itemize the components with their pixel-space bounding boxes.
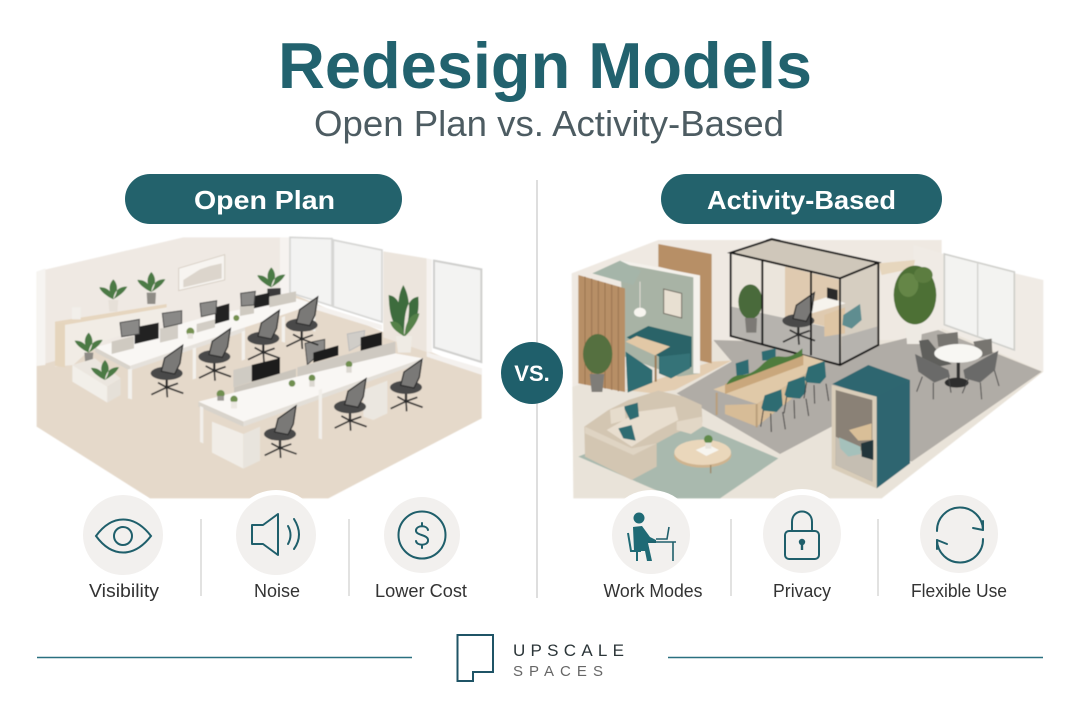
illustration: open plan office [37, 237, 482, 498]
back row chairs [120, 291, 365, 365]
logo mark [458, 635, 493, 681]
icon: dollar coin [398, 512, 446, 558]
floor [572, 327, 1043, 498]
booth rear slat wall [658, 244, 712, 363]
baseboard [317, 305, 382, 330]
shelf plants [72, 272, 165, 319]
feature: Privacy [757, 489, 847, 601]
tall back plant [257, 267, 285, 298]
feature: Lower Cost: Lower Cost [375, 581, 467, 601]
icon: person at desk [628, 512, 676, 561]
back wall [572, 240, 942, 387]
lower desk [198, 353, 423, 443]
window mullion [976, 263, 980, 337]
long table seats rear [736, 348, 776, 377]
icon: speaker [252, 514, 299, 555]
feature: Privacy: Privacy [773, 581, 831, 601]
feature: Work Modes: Work Modes [604, 581, 702, 601]
pill: Open Plan [125, 174, 402, 224]
window 1 [290, 237, 332, 306]
logo wordmark [513, 641, 624, 680]
floor [37, 290, 482, 498]
soffit [878, 260, 915, 275]
feature: Noise: Noise [254, 581, 300, 601]
upper row chairs [151, 297, 318, 397]
feature dividers [201, 519, 878, 596]
logo wordmark: UPSCALE [513, 641, 624, 660]
feature: Lower Cost [375, 490, 467, 601]
wood strip under booth [625, 361, 732, 393]
round meeting table [915, 332, 999, 399]
footer line right [668, 656, 1043, 658]
lower desk small plants [217, 361, 352, 408]
vs badge [501, 342, 563, 404]
feature: Visibility [78, 490, 168, 601]
left wall end [37, 268, 45, 366]
large floor plant [894, 266, 936, 344]
wall cabinet [55, 304, 167, 367]
pill: Activity-Based [661, 174, 942, 224]
pedestals [212, 381, 387, 469]
feature: Flexible Use: Flexible Use [911, 581, 1007, 601]
feature: Noise [231, 490, 321, 601]
icon: padlock [785, 512, 819, 559]
window 2 [333, 240, 382, 322]
logo wordmark: SPACES [513, 663, 603, 680]
booth [592, 260, 700, 377]
grey carpet [677, 330, 1042, 462]
icon: eye [96, 520, 151, 552]
feature: Work Modes [604, 490, 702, 601]
back wall [37, 237, 280, 366]
window [944, 254, 1014, 350]
window 3 [434, 261, 481, 362]
icon: refresh arrows [937, 508, 983, 562]
long communal table [713, 355, 825, 427]
pill: Activity-Based: Activity-Based [707, 185, 896, 215]
glass room [731, 239, 878, 365]
vs badge: VS. [514, 361, 550, 386]
center divider [536, 180, 538, 598]
artwork [179, 255, 225, 291]
sofa [584, 391, 702, 480]
feature: Visibility: Visibility [89, 581, 159, 601]
front slat wall [578, 275, 625, 392]
illustration: activity-based office [572, 239, 1043, 498]
booth seating [626, 326, 692, 393]
lower desk back monitors and panels [233, 332, 395, 404]
footer line left [37, 656, 412, 658]
lower row chairs [264, 359, 423, 458]
small potted plants on desks [75, 315, 239, 364]
sage rug [578, 423, 778, 498]
right wall [913, 245, 1043, 372]
coffee table [674, 435, 731, 473]
right wall [383, 251, 427, 352]
planter box [72, 358, 121, 403]
phone pod [832, 365, 910, 488]
pill: Open Plan: Open Plan [194, 185, 335, 215]
title: Redesign Models [278, 29, 812, 102]
upper desk screens [112, 291, 296, 354]
subtitle: Open Plan vs. Activity-Based [314, 103, 784, 144]
floor plant right [389, 285, 419, 353]
upper desk row [95, 298, 315, 399]
planter [725, 348, 803, 394]
column [280, 237, 290, 297]
column right [427, 258, 432, 353]
feature: Flexible Use [911, 489, 1007, 601]
slat plant [583, 334, 612, 392]
teal table chairs [761, 361, 829, 432]
